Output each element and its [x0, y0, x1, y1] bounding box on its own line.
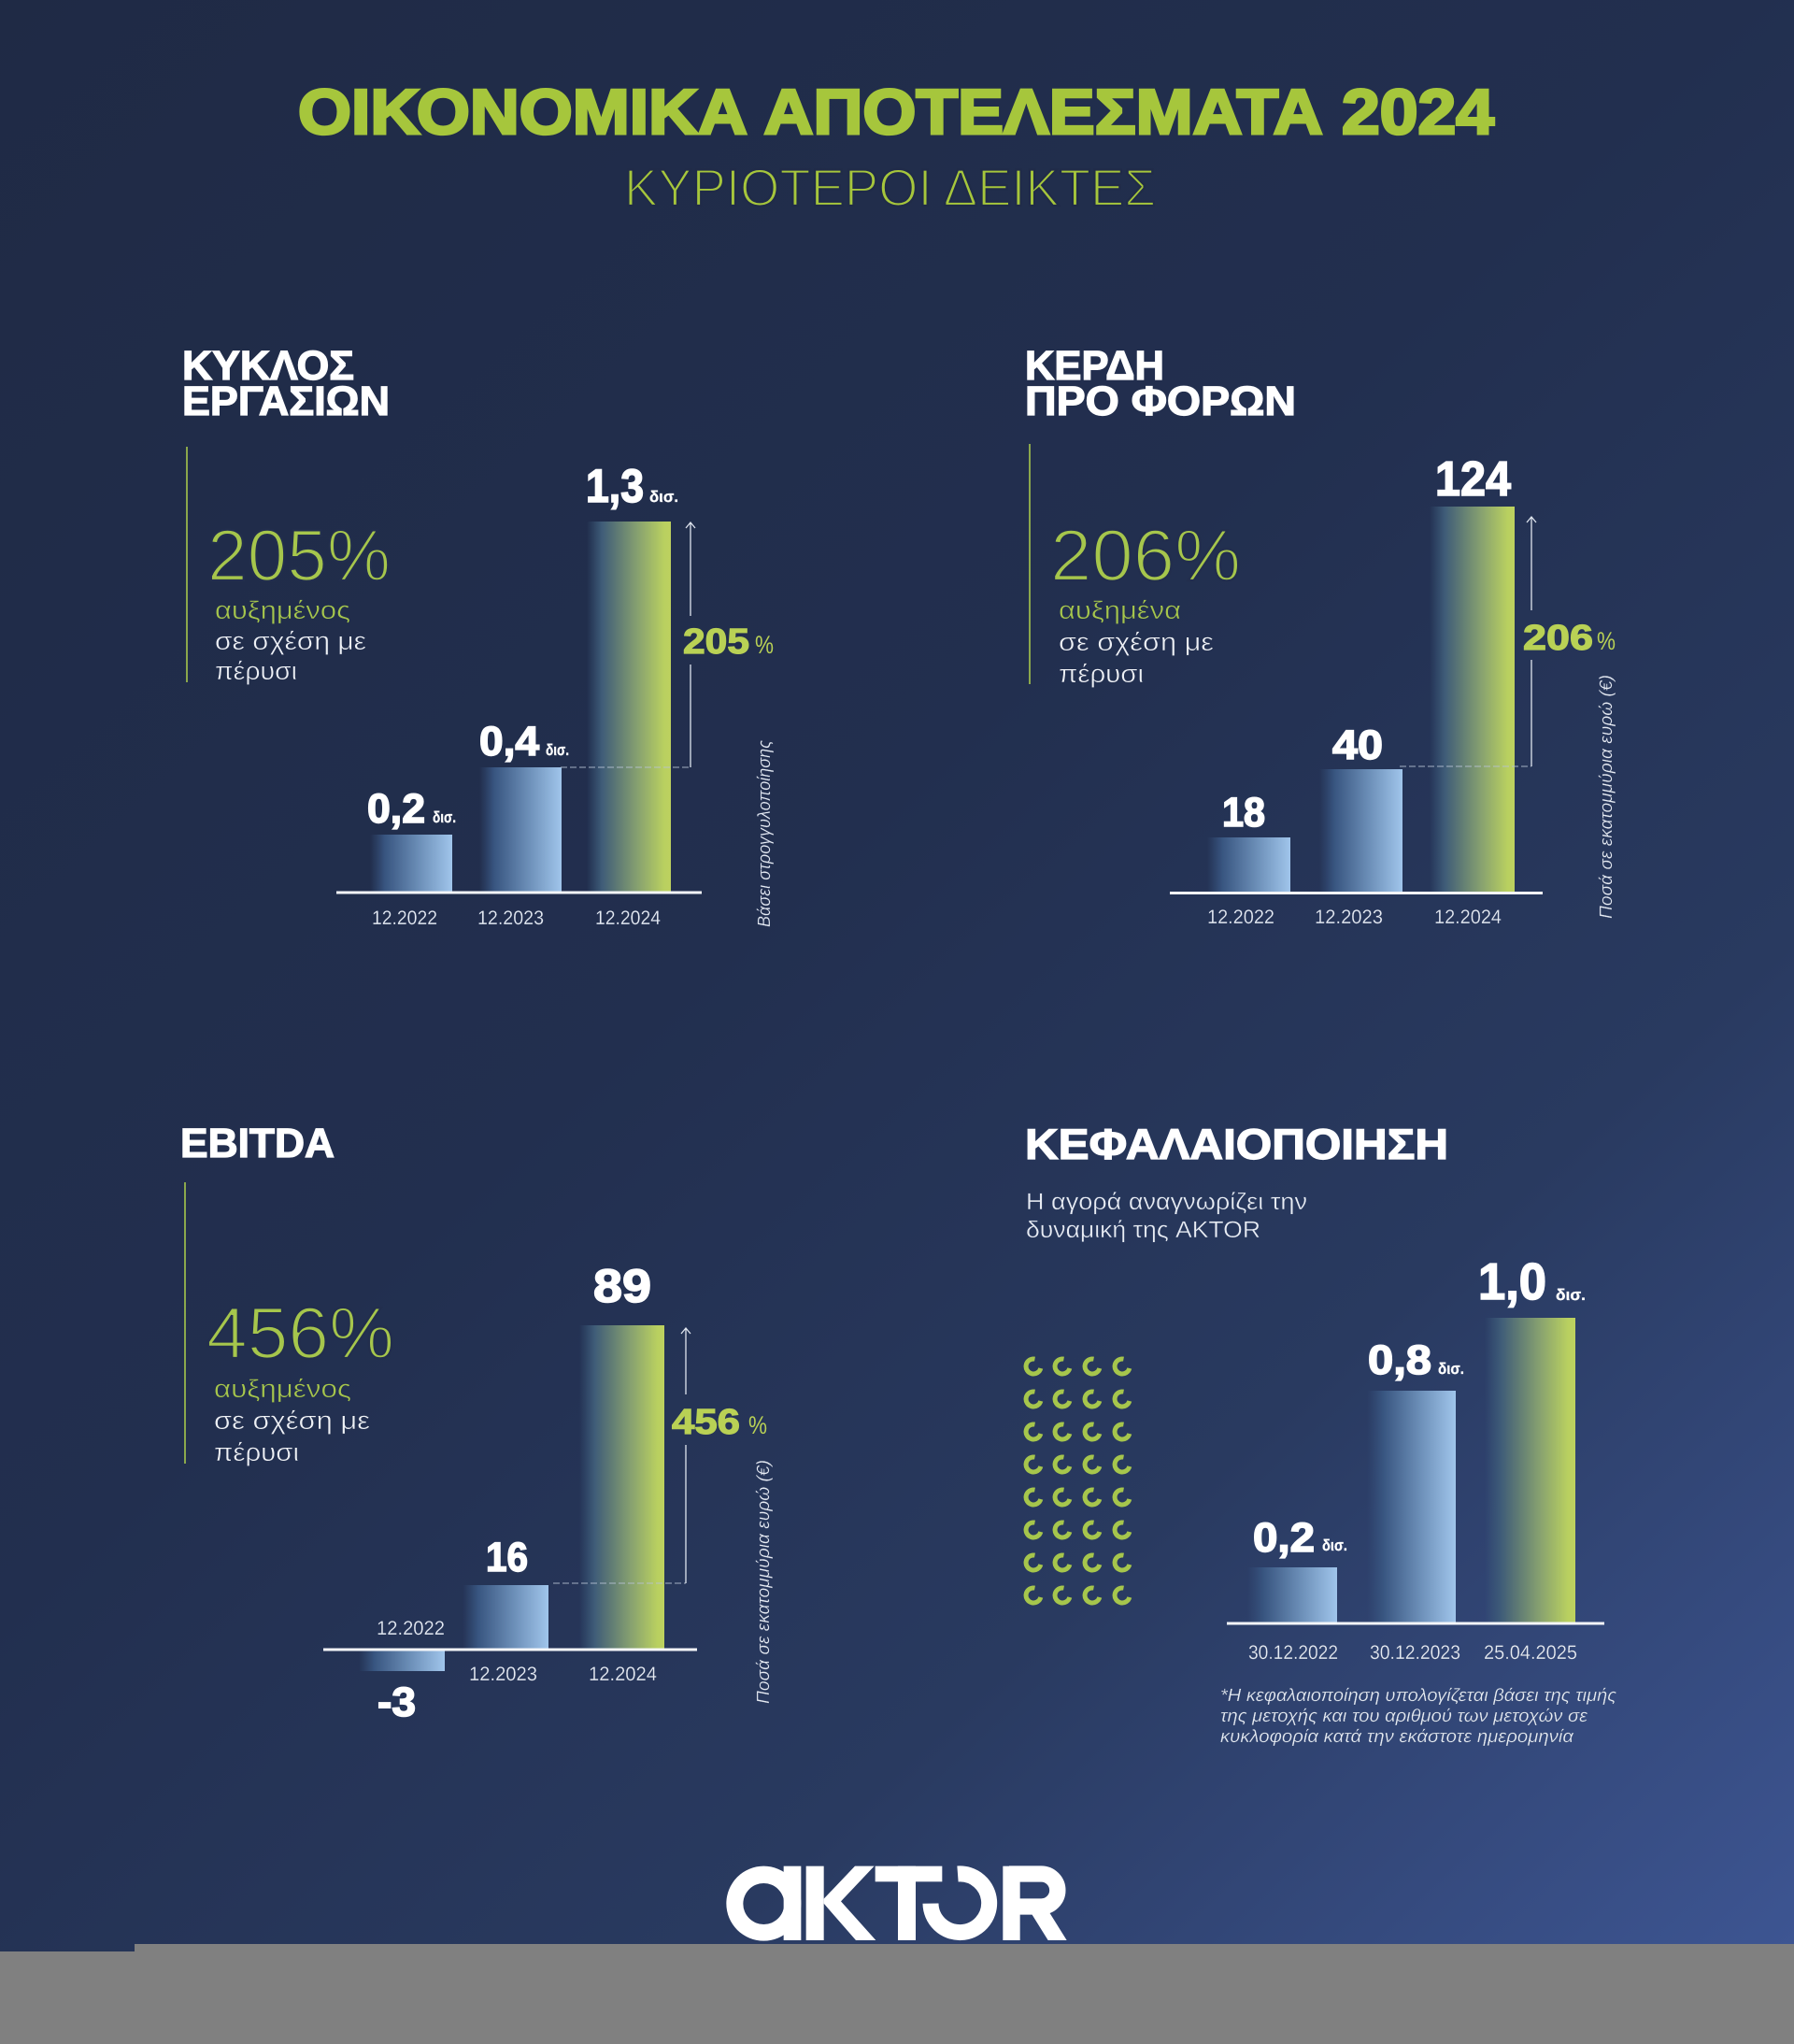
arrow: growth 206: 206 — [1523, 619, 1593, 658]
subtitle: ΚΥΡΙΟΤΕΡΟΙ ΔΕΙΚΤΕΣ — [624, 158, 1156, 217]
text block: market recognition: δυναμική της AKTOR — [1026, 1217, 1260, 1243]
bar chart: turnover: δισ. — [649, 488, 678, 506]
bar chart: turnover: 0,4 — [479, 719, 540, 765]
heading: pre-tax profit — [1025, 343, 1296, 424]
arrow: growth 205: % — [755, 631, 774, 659]
note: million euro: Ποσά σε εκατομμύρια ευρώ (€) — [1597, 675, 1616, 919]
bar chart: turnover: δισ. — [546, 741, 569, 759]
callout: 205 percent increase — [187, 447, 391, 685]
bar chart: market capitalisation: 0,2 — [1253, 1515, 1315, 1561]
title: ΟΙΚΟΝΟΜΙΚΑ ΑΠΟΤΕΛΕΣΜΑΤΑ 2024 — [298, 77, 1494, 148]
bar chart: pre-tax profit: 18 — [1222, 790, 1265, 836]
logo: AKTOR — [726, 1866, 1067, 1941]
arrow: growth 205: 205 — [683, 622, 749, 662]
bar chart: pre-tax profit: 12.2022 — [1207, 907, 1274, 928]
heading: turnover: ΚΥΚΛΟΣ — [182, 343, 354, 389]
bar chart: market capitalisation: 30.12.2023 — [1370, 1642, 1460, 1664]
bar chart: EBITDA: 89 — [593, 1260, 651, 1312]
callout: 206 percent increase: πέρυσι — [1059, 660, 1144, 688]
bar chart: EBITDA: 12.2023 — [469, 1664, 537, 1685]
footnote: της μετοχής και του αριθμού των μετοχών σε — [1220, 1707, 1588, 1726]
callout: 206 percent increase: αυξημένα — [1059, 596, 1181, 624]
panel: EBITDA — [180, 1121, 774, 1725]
arrow: growth 206: % — [1597, 627, 1616, 655]
callout: 456 percent increase: αυξημένος — [214, 1375, 351, 1403]
arrow: growth 456 — [553, 1328, 767, 1583]
arrow: growth 206 — [1400, 517, 1616, 766]
note: rounding: Βάσει στρογγυλοποίησης — [755, 739, 775, 927]
bar chart: EBITDA: 16 — [486, 1535, 528, 1580]
heading: market capitalisation: ΚΕΦΑΛΑΙΟΠΟΙΗΣΗ — [1025, 1120, 1448, 1168]
arrow: growth 456: % — [748, 1411, 767, 1439]
panel: market capitalisation — [1025, 1120, 1617, 1747]
callout: 205 percent increase: σε σχέση με — [215, 627, 366, 655]
panel: pre-tax profit — [1025, 343, 1616, 928]
callout: 205 percent increase: 205% — [207, 514, 391, 596]
bar chart: market capitalisation: 25.04.2025 — [1484, 1642, 1577, 1664]
callout: 456 percent increase: 456% — [206, 1292, 394, 1374]
bar chart: turnover: 0,2 — [367, 786, 425, 832]
bar chart: EBITDA: 12.2024 — [589, 1664, 657, 1685]
note: million euro: Ποσά σε εκατομμύρια ευρώ (€) — [754, 1460, 774, 1704]
footnote: *Η κεφαλαιοποίηση υπολογίζεται βάσει της τιμής — [1220, 1686, 1617, 1706]
bar chart: market capitalisation — [1227, 1252, 1604, 1664]
grey footer band — [0, 1944, 1794, 2044]
callout: 456 percent increase — [185, 1182, 394, 1466]
heading: turnover — [182, 343, 390, 424]
callout: 205 percent increase: πέρυσι — [215, 657, 297, 685]
callout: 206 percent increase: 206% — [1050, 514, 1241, 596]
bar chart: market capitalisation: 1,0 — [1478, 1252, 1546, 1310]
bar chart: market capitalisation: δισ. — [1556, 1286, 1586, 1304]
callout: 205 percent increase: αυξημένος — [215, 596, 350, 624]
bar chart: turnover: δισ. — [433, 808, 456, 826]
bar chart: market capitalisation: δισ. — [1438, 1360, 1464, 1378]
callout: 456 percent increase: πέρυσι — [214, 1438, 299, 1466]
bar chart: pre-tax profit: 124 — [1435, 452, 1511, 507]
callout: 206 percent increase — [1030, 444, 1241, 688]
bar chart: EBITDA: -3 — [377, 1680, 416, 1725]
bar chart: EBITDA — [323, 1260, 697, 1725]
callout: 206 percent increase: σε σχέση με — [1059, 628, 1214, 656]
bar chart: turnover: 1,3 — [586, 460, 644, 512]
bar chart: turnover: 12.2024 — [595, 908, 661, 929]
bar chart: turnover — [336, 460, 702, 929]
bar chart: market capitalisation: 0,8 — [1368, 1337, 1431, 1383]
heading: pre-tax profit: ΚΕΡΔΗ — [1025, 343, 1164, 389]
heading: EBITDA: EBITDA — [180, 1121, 335, 1166]
text block: market recognition: Η αγορά αναγνωρίζει την — [1026, 1189, 1307, 1215]
arrow: growth 456: 456 — [672, 1403, 740, 1442]
bar chart: market capitalisation: δισ. — [1322, 1537, 1347, 1554]
arrow: growth 205 — [561, 522, 774, 767]
bar chart: pre-tax profit — [1170, 452, 1543, 928]
footnote: κυκλοφορία κατά την εκάστοτε ημερομηνία — [1220, 1727, 1574, 1747]
bar chart: pre-tax profit: 12.2024 — [1434, 907, 1502, 928]
bar chart: pre-tax profit: 40 — [1332, 722, 1383, 768]
footnote — [1220, 1686, 1617, 1747]
bar chart: pre-tax profit: 12.2023 — [1315, 907, 1383, 928]
bar chart: turnover: 12.2023 — [477, 908, 544, 929]
icon: ring pattern — [1026, 1359, 1130, 1603]
heading: turnover: ΕΡΓΑΣΙΩΝ — [182, 379, 390, 424]
bar chart: EBITDA: 12.2022 — [377, 1618, 445, 1639]
bar chart: turnover: 12.2022 — [372, 908, 437, 929]
callout: 456 percent increase: σε σχέση με — [214, 1407, 370, 1435]
panel: turnover — [182, 343, 775, 929]
text block: market recognition — [1026, 1189, 1307, 1243]
bar chart: market capitalisation: 30.12.2022 — [1248, 1642, 1338, 1664]
heading: pre-tax profit: ΠΡΟ ΦΟΡΩΝ — [1025, 379, 1296, 424]
